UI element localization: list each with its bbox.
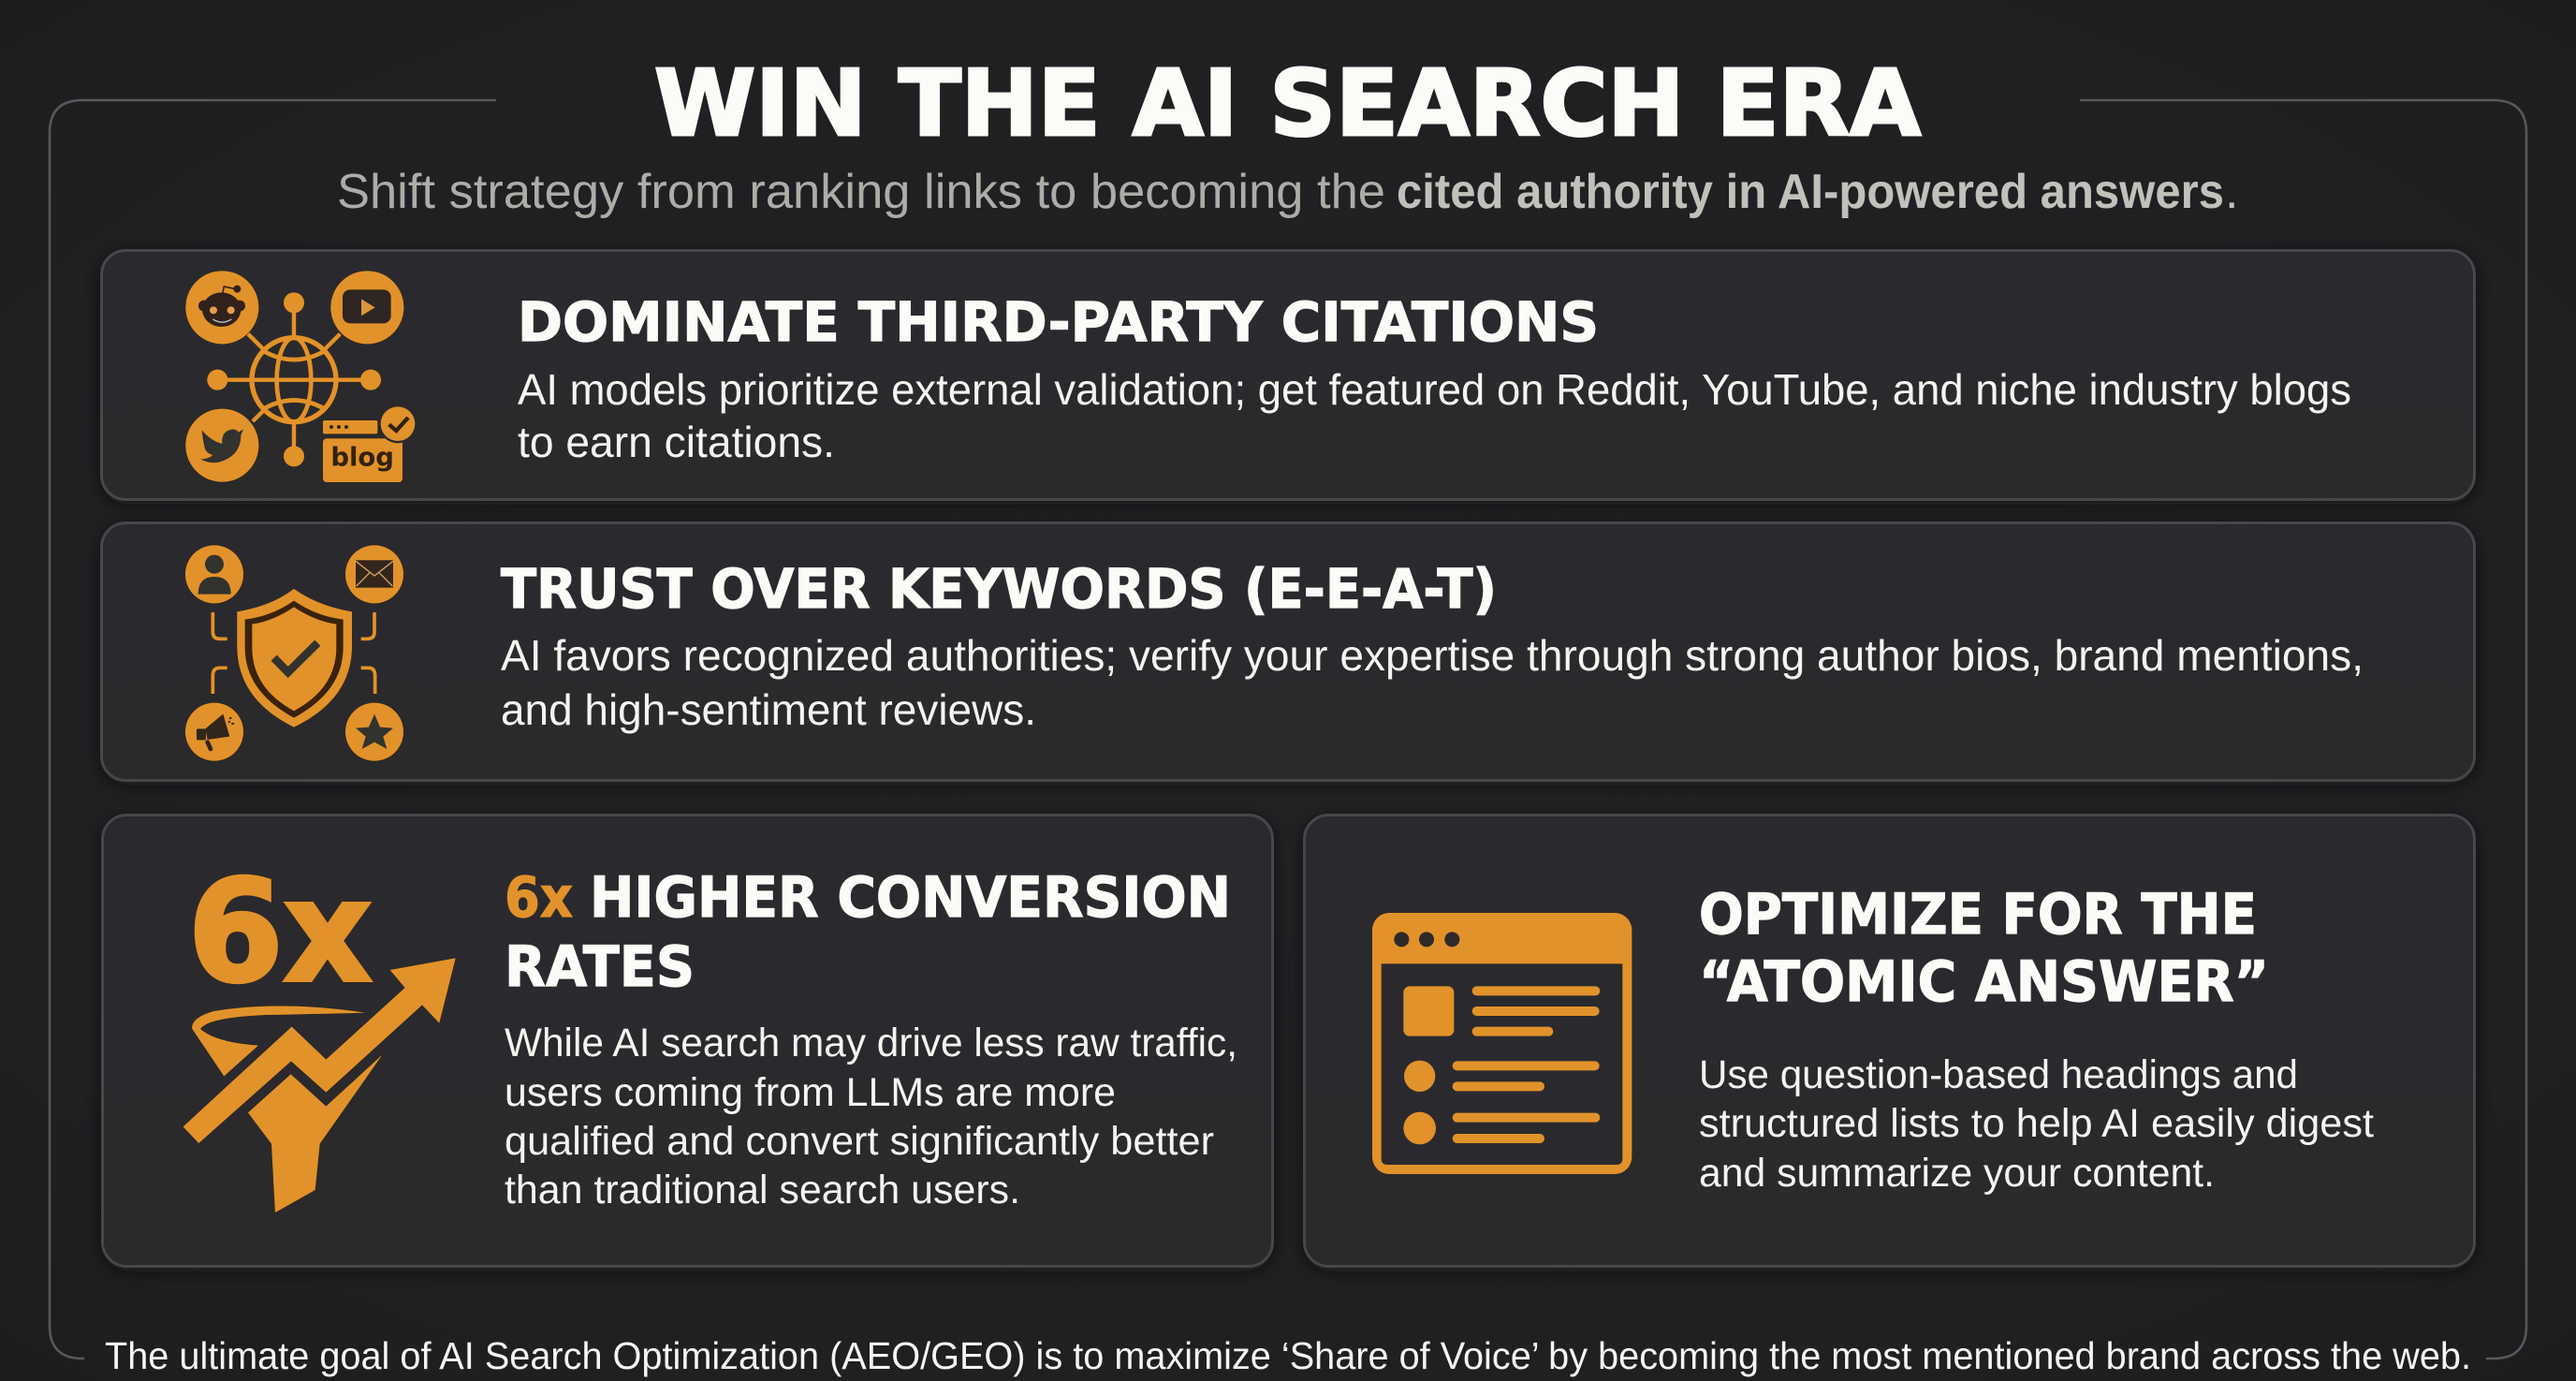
panel: optimize for the atomic answer [1305,815,2475,1266]
body text [501,631,2364,734]
heading: TRUST OVER KEYWORDS (E-E-A-T) [501,557,1497,621]
panel: dominate third-party citations [101,251,2475,500]
body text: qualified and convert significantly better [505,1119,1214,1164]
icon: citation network [185,271,417,482]
body text: and summarize your content. [1699,1151,2215,1196]
subtitle: . [2225,165,2238,219]
body text: structured lists to help AI easily digest [1699,1101,2374,1146]
heading: 6x [505,865,573,931]
heading [505,865,1231,1000]
footer statement: The ultimate goal of AI Search Optimization (AEO/GEO) is to maximize ‘Share of Voice’ by becoming the most mentioned brand across the web. [105,1334,2471,1377]
icon: citation network: blog [330,441,394,472]
heading: OPTIMIZE FOR THE [1699,882,2257,948]
title: WIN THE AI SEARCH ERA [654,51,1921,156]
heading: HIGHER CONVERSION [590,865,1231,931]
body text: While AI search may drive less raw traffic, [505,1021,1237,1065]
heading: “ATOMIC ANSWER” [1699,949,2269,1015]
body text [505,1021,1237,1212]
body text: AI models prioritize external validation; get featured on Reddit, YouTube, and niche industry blogs [518,365,2351,414]
heading [1699,882,2269,1015]
body text [1699,1052,2374,1196]
body text: Use question-based headings and [1699,1052,2298,1097]
icon: 6x funnel and growth arrow [183,851,456,1212]
body text: than traditional search users. [505,1168,1020,1212]
subtitle: Shift strategy from ranking links to becoming the [337,165,1385,219]
body text: AI favors recognized authorities; verify your expertise through strong author bios, brand mentions, [501,631,2364,680]
body text: and high-sentiment reviews. [501,685,1036,734]
panel: 6x higher conversion rates [103,815,1273,1266]
body text [518,365,2351,466]
heading: DOMINATE THIRD-PARTY CITATIONS [518,290,1599,354]
heading: RATES [505,934,695,1000]
body text: to earn citations. [518,418,835,466]
subtitle: cited authority in AI-powered answers [1397,165,2224,219]
icon: 6x funnel and growth arrow: 6x [188,851,372,1014]
icon: trust shield [185,545,403,761]
body text: users coming from LLMs are more [505,1070,1116,1115]
subtitle [337,165,2238,219]
icon: structured content window [1372,913,1632,1174]
panel: trust over keywords [101,522,2475,781]
